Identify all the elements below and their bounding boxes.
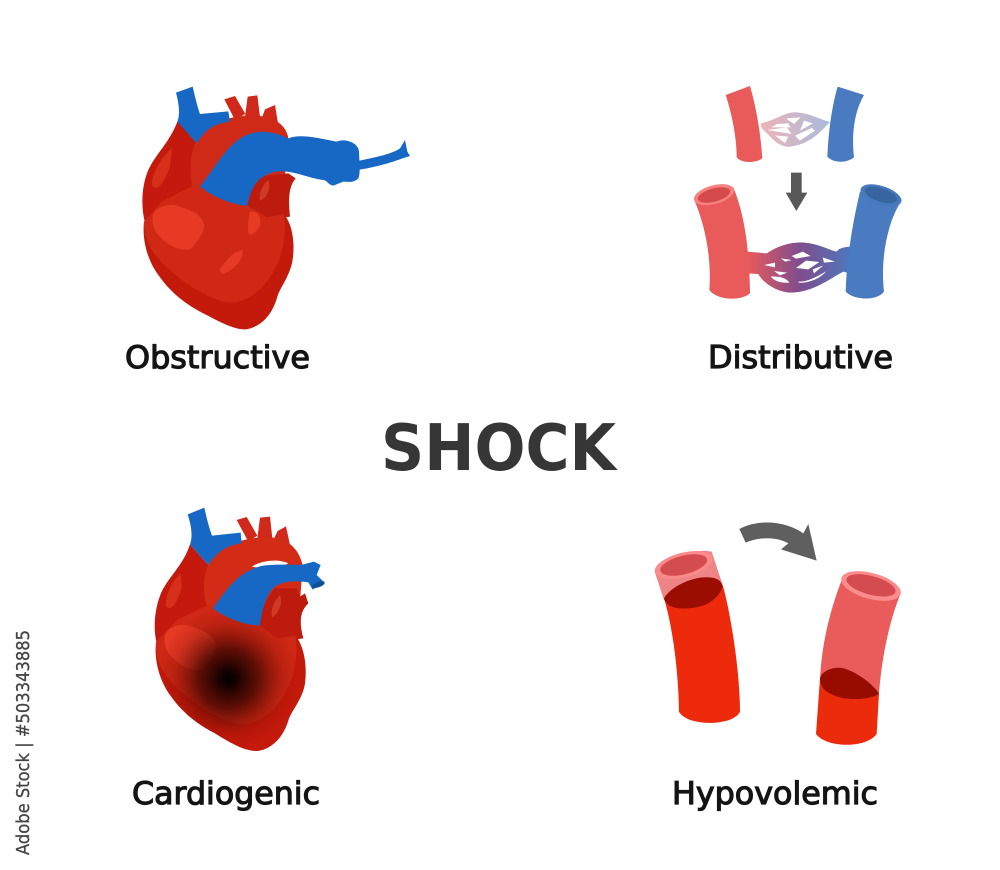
icon: dilated capillary bed <box>747 242 853 293</box>
label: Distributive: Distributive <box>708 340 893 376</box>
icon: hypovolemic vessels <box>652 523 904 745</box>
vertical credit text: Adobe Stock | #503343885 <box>13 630 34 855</box>
icon: normal capillary bed <box>761 112 830 147</box>
arrow: curved <box>739 523 817 561</box>
label: Cardiogenic: Cardiogenic <box>132 776 320 812</box>
icon: distributive vessels with capillary bed <box>692 86 904 299</box>
icon: dilated vein <box>846 180 904 299</box>
icon: obstructive heart with blocked pulmonary vessel <box>142 87 410 329</box>
icon: dilated artery <box>692 180 750 299</box>
icon: cardiogenic heart with infarct <box>155 508 326 751</box>
icon: depleted vessel <box>816 566 904 745</box>
title: SHOCK <box>381 412 618 486</box>
icon: full vessel <box>652 546 740 723</box>
label: Obstructive: Obstructive <box>125 340 310 376</box>
label: Hypovolemic: Hypovolemic <box>672 776 878 812</box>
arrow: down <box>786 173 807 211</box>
